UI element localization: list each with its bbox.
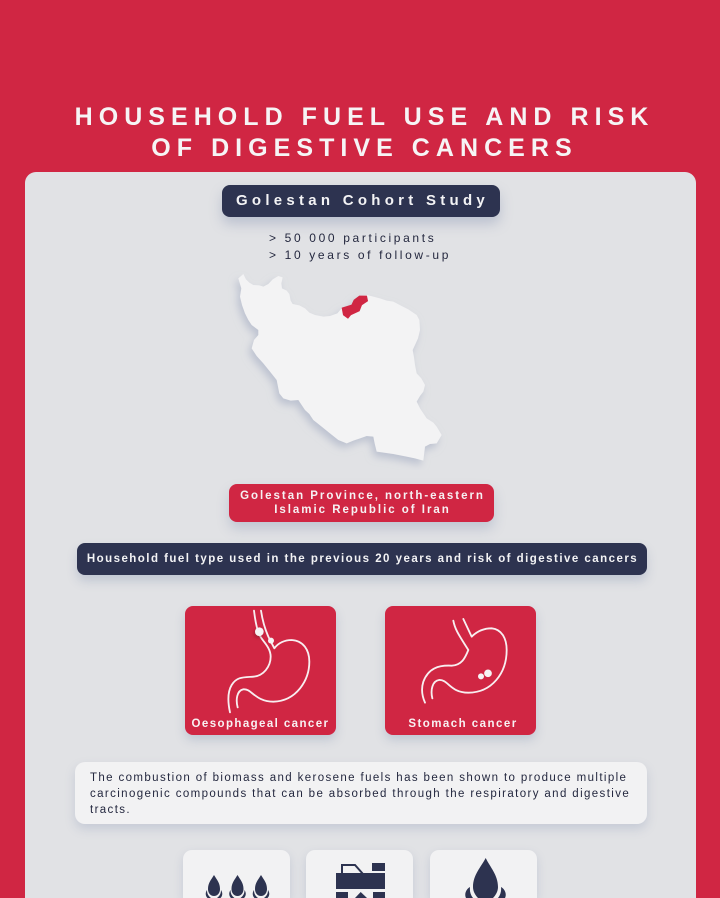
title: HOUSEHOLD FUEL USE AND RISK: [75, 103, 654, 131]
text block: combustion explanation: tracts.: [90, 804, 131, 816]
map: Iran with Golestan Province: [234, 274, 442, 466]
label: stomach cancer: Stomach cancer: [408, 718, 518, 730]
icon: kerosene canister: [336, 863, 385, 898]
label: oesophageal cancer: Oesophageal cancer: [192, 718, 329, 730]
icon: large flame: [465, 858, 506, 898]
title: [75, 103, 654, 162]
card: gas fuel: [183, 850, 290, 898]
text: study facts: > 50 000 participants: [269, 231, 436, 245]
map: Iran outline: [238, 274, 442, 461]
map: Golestan Province: [342, 296, 368, 318]
heading: fuel type: Household fuel type used in the previous 20 years and risk of digestive cancers: [87, 553, 638, 565]
card: oesophageal cancer: [185, 606, 336, 735]
label: Golestan Province: Golestan Province, north-eastern: [240, 490, 485, 502]
icon: oesophagus and stomach: [227, 610, 310, 714]
text block: combustion explanation: carcinogenic compounds that can be absorbed through the respiratory and digestive: [90, 788, 630, 800]
heading: fuel type: [77, 543, 647, 575]
text block: combustion explanation: The combustion of biomass and kerosene fuels has been shown to produce multiple: [90, 772, 627, 784]
heading: Golestan Cohort Study: [222, 185, 500, 217]
card: biomass fuel: [430, 850, 537, 898]
card: kerosene fuel: [306, 850, 413, 898]
heading: Golestan Cohort Study: Golestan Cohort Study: [236, 192, 489, 209]
label: Golestan Province: [229, 484, 494, 522]
icon: stomach: [421, 618, 508, 704]
text: study facts: [269, 231, 451, 262]
panel: main content: [25, 172, 696, 898]
text: study facts: > 10 years of follow-up: [269, 248, 451, 262]
text block: combustion explanation: [75, 762, 647, 824]
icon: three flames: [206, 875, 270, 898]
title: OF DIGESTIVE CANCERS: [151, 134, 578, 162]
card: stomach cancer: [385, 606, 536, 735]
label: Golestan Province: Islamic Republic of Iran: [274, 504, 451, 516]
